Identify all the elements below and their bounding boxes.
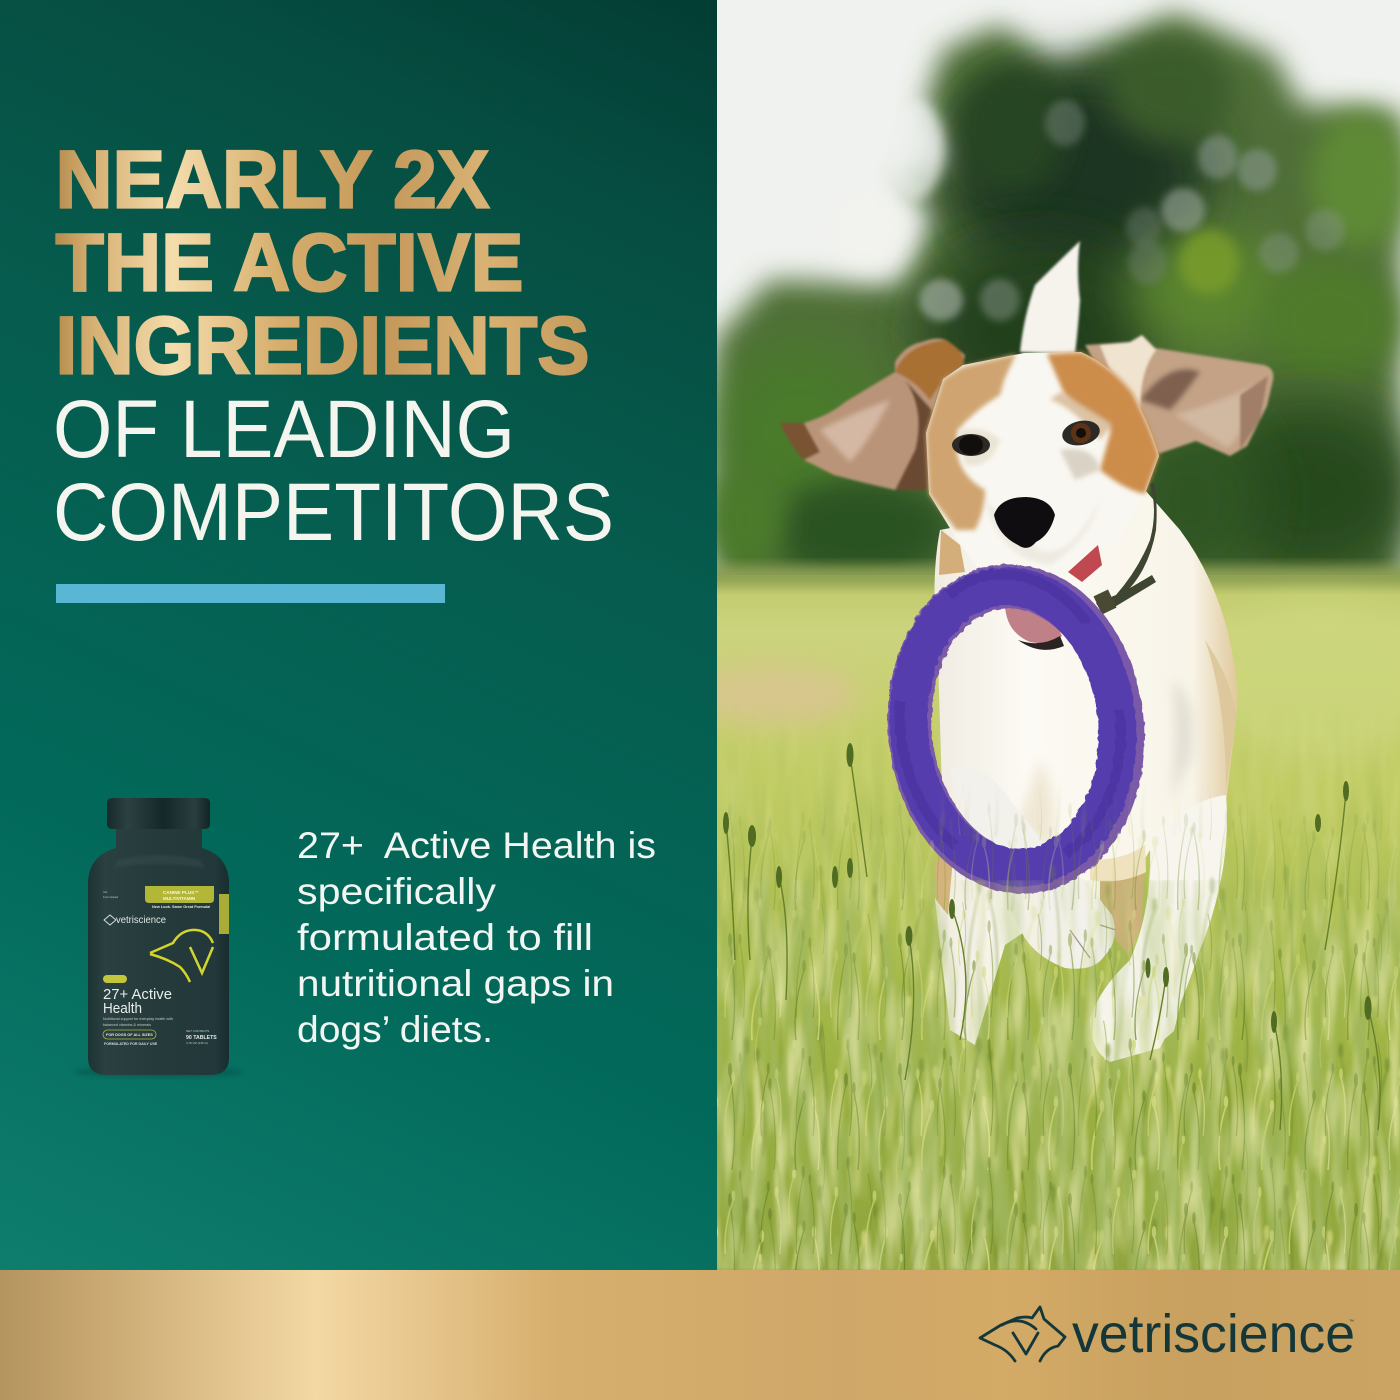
dog eyes	[952, 417, 1102, 456]
logo wordmark: vetriscience	[1072, 1304, 1355, 1364]
foreground grass	[717, 700, 1400, 1270]
bottle dog mark	[150, 930, 213, 982]
dog raised front leg	[1010, 806, 1115, 969]
panel: green headline panel	[0, 0, 717, 1270]
dog mouth and tongue	[1005, 545, 1102, 650]
text block: product description: dogs’ diets.	[297, 1008, 493, 1050]
dog tail	[1020, 241, 1080, 354]
bottle label tag: CANINE PLUS™	[163, 890, 199, 895]
icon: supplement bottle: FOR DOGS OF ALL SIZES	[106, 1033, 153, 1037]
icon: supplement bottle: 4.76 OZ (135 G)	[186, 1041, 208, 1045]
heading line: OF LEADING: OF LEADING	[53, 384, 515, 475]
text block: product description	[297, 824, 656, 1050]
heading line: INGREDIENTS: INGREDIENTS	[56, 300, 590, 392]
icon: supplement bottle: Formulated	[103, 895, 119, 899]
left ear	[780, 338, 965, 490]
bottle product name: Health	[103, 1001, 142, 1017]
right ear	[1085, 335, 1273, 456]
heading line: COMPETITORS: COMPETITORS	[53, 467, 614, 558]
purple ring toy	[885, 563, 1136, 882]
text block: product description: specifically	[297, 870, 496, 912]
bottle label tag	[145, 886, 214, 903]
text block: product description: formulated to fill	[297, 916, 593, 958]
icon: supplement bottle: balanced vitamins & minerals	[103, 1023, 151, 1027]
bottle label tag: MULTIVITAMIN	[163, 896, 196, 901]
text block: product description: nutritional gaps in	[297, 962, 614, 1004]
panel: photo of dog running with purple ring	[690, 0, 1400, 1270]
logo: vetriscience	[980, 1304, 1355, 1364]
logo icon: dog head with V	[980, 1307, 1065, 1361]
head shading	[958, 429, 1000, 466]
heading line: THE ACTIVE: THE ACTIVE	[56, 218, 524, 308]
icon: supplement bottle: New Look. Same Great Formula!	[152, 905, 210, 909]
accent bar	[56, 584, 445, 603]
dog nose	[994, 497, 1055, 548]
dog belly shadow	[1100, 872, 1144, 955]
dog right front leg	[1090, 795, 1227, 1062]
text block: product description: 27+ Active Health is	[297, 824, 656, 866]
dog body	[934, 490, 1238, 1060]
heading: gold and white headline	[53, 134, 614, 558]
dog	[780, 241, 1273, 1062]
dog head	[926, 352, 1159, 575]
icon: supplement bottle: 90 TABLETS	[186, 1035, 217, 1041]
heading line: NEARLY 2X: NEARLY 2X	[56, 134, 490, 226]
icon: supplement bottle: Nutritional support for everyday health with	[103, 1017, 173, 1021]
chest tan patch	[939, 530, 965, 575]
bottle logo: vetriscience	[116, 915, 166, 926]
bottle product name	[103, 987, 172, 1017]
icon: supplement bottle	[73, 798, 243, 1078]
dog collar	[1094, 482, 1157, 614]
logo: vetriscience: ™	[1349, 1319, 1354, 1325]
background trees	[705, 12, 1400, 600]
bottle product name: 27+ Active	[103, 987, 172, 1003]
icon: supplement bottle: FORMULATED FOR DAILY USE	[104, 1042, 158, 1046]
icon: supplement bottle: Vet	[103, 890, 108, 894]
footer: gold band	[0, 1270, 1400, 1400]
icon: supplement bottle: NET CONTENTS	[186, 1029, 209, 1033]
head tan patches	[926, 352, 1159, 530]
meadow	[690, 566, 1400, 1270]
